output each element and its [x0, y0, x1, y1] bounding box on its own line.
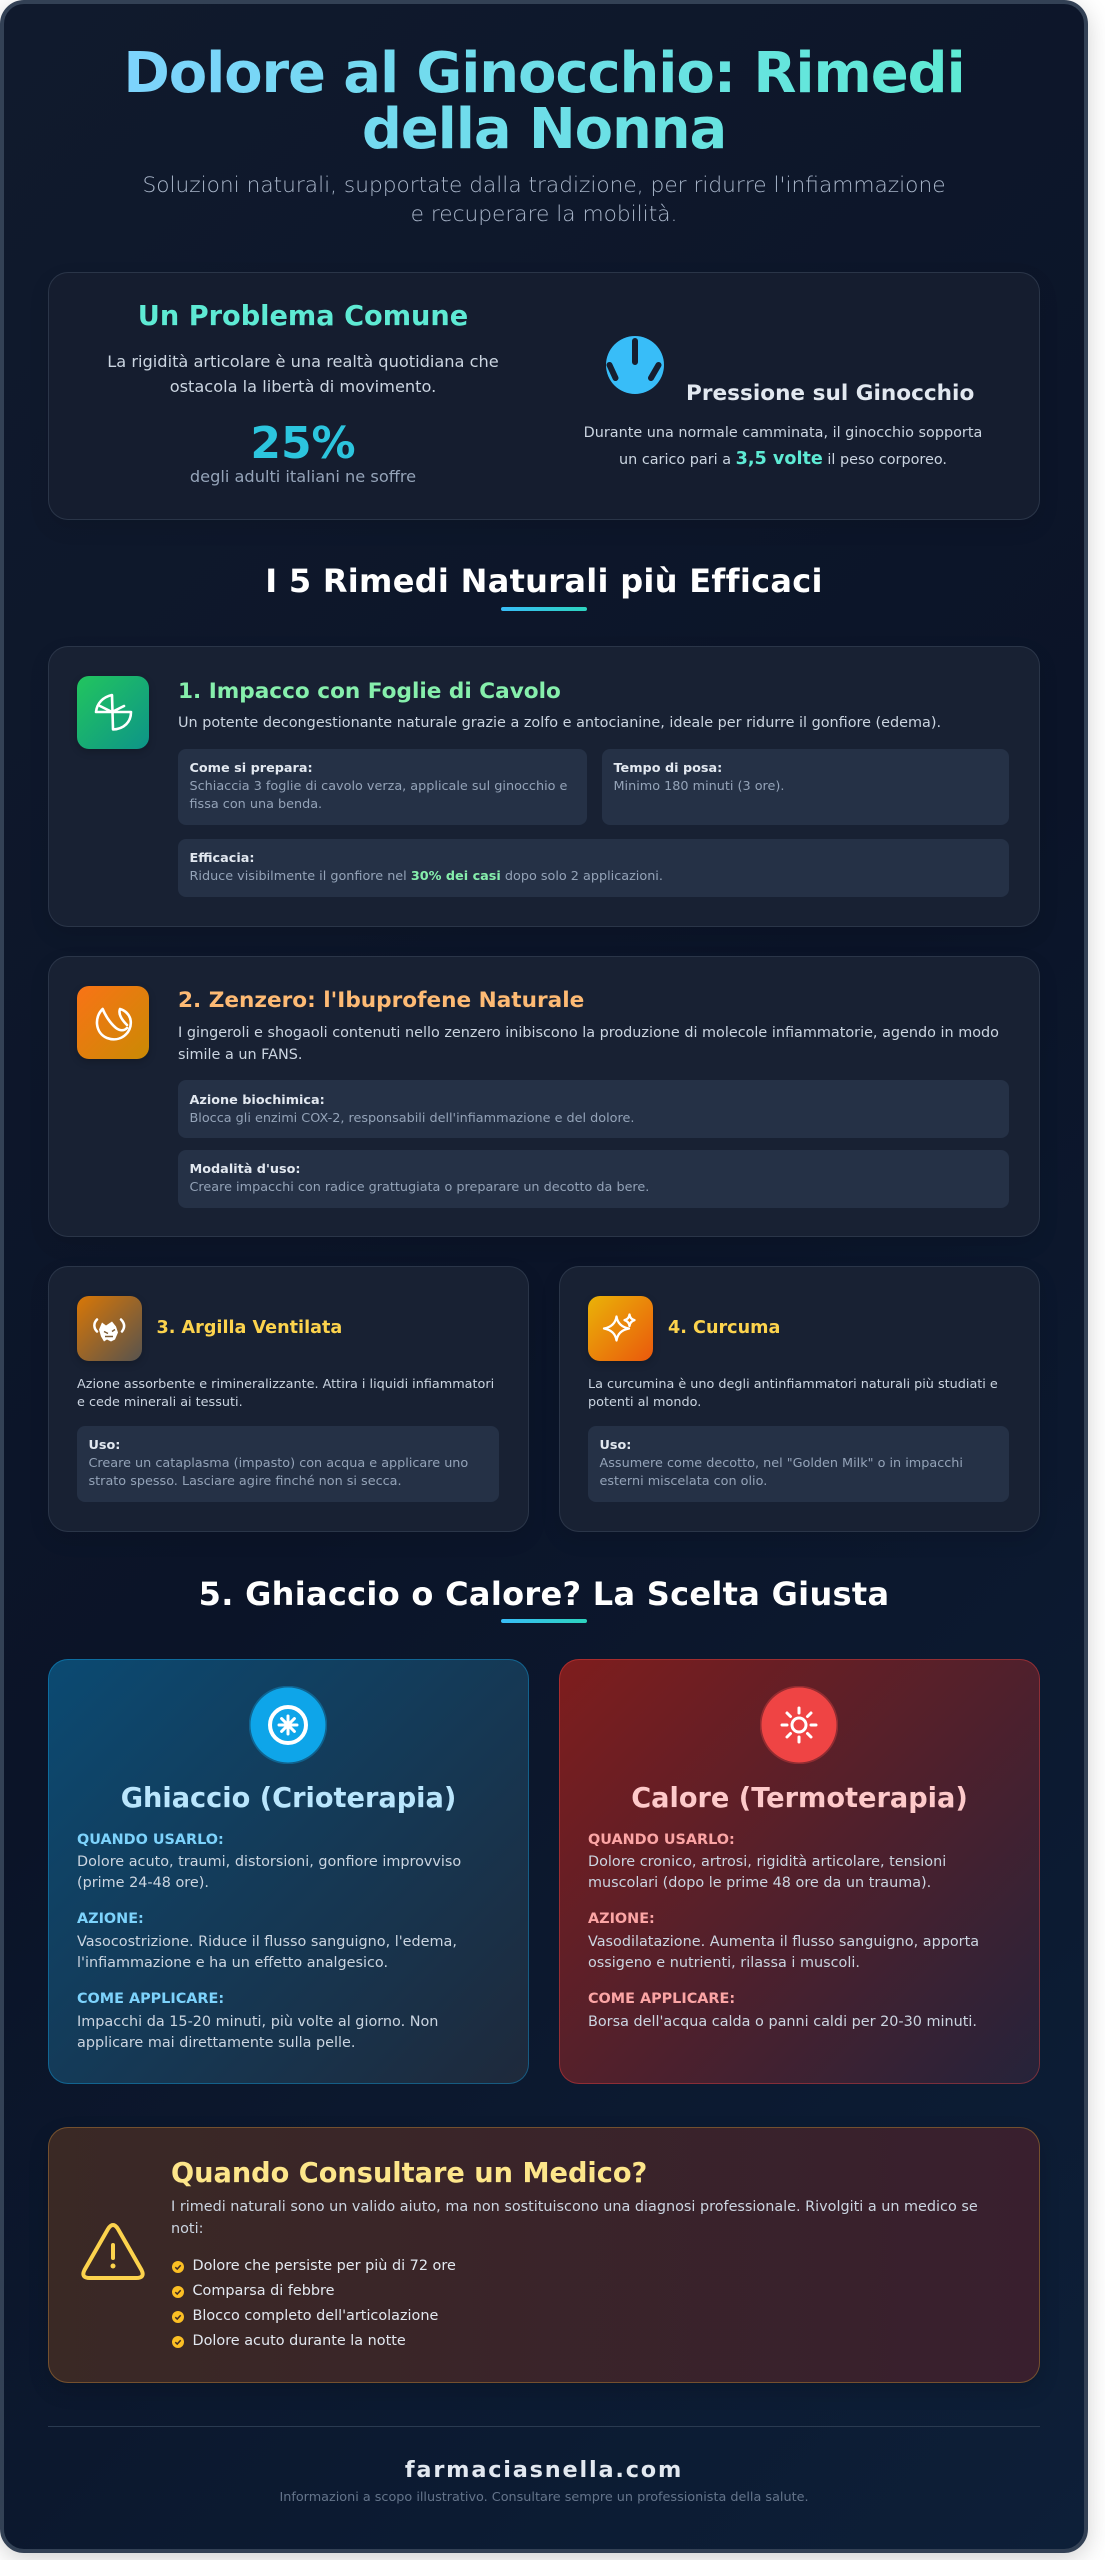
- icon: snowflake: [249, 1686, 327, 1764]
- list item 1: Dolore che persiste per più di 72 ore: [192, 2258, 456, 2274]
- box: use: Uso:: [88, 1438, 120, 1453]
- box: use: Uso:: [600, 1438, 631, 1453]
- text: pressure: Durante una normale camminata, il ginocchio sopporta: [584, 425, 982, 441]
- heading: 4. Curcuma: [668, 1318, 780, 1338]
- panel: ice therapy: [48, 1659, 529, 2084]
- box: how to use: Creare impacchi con radice grattugiata o preparare un decotto da bere.: [190, 1180, 649, 1195]
- list item 4: Dolore acuto durante la notte: [192, 2333, 406, 2349]
- heading: pressione: Pressione sul Ginocchio: [686, 380, 974, 406]
- description: simile a un FANS.: [178, 1047, 302, 1063]
- description: potenti al mondo.: [588, 1395, 701, 1410]
- panel: remedy 3 clay: [48, 1266, 529, 1532]
- title: della Nonna: [362, 97, 726, 162]
- box: biochemical action: Blocca gli enzimi COX-2, responsabili dell'infiammazione e del dolore.: [190, 1111, 634, 1126]
- description: Un potente decongestionante naturale grazie a zolfo e antocianine, ideale per ridurre il gonfiore (edema).: [178, 715, 941, 731]
- heading: Quando Consultare un Medico?: [171, 2158, 647, 2188]
- box: use: [77, 1426, 499, 1502]
- subtitle: e recuperare la mobilità.: [411, 202, 677, 227]
- box: how to use: [178, 1150, 1009, 1208]
- heading: 3. Argilla Ventilata: [156, 1318, 342, 1338]
- subtitle: Soluzioni naturali, supportate dalla tradizione, per ridurre l'infiammazione: [142, 173, 946, 198]
- description: noti:: [171, 2221, 203, 2237]
- panel: when to see a doctor: [48, 2127, 1040, 2383]
- box: preparation: fissa con una benda.: [190, 797, 322, 812]
- box: use: esterni miscelata con olio.: [600, 1474, 767, 1489]
- text: Dolore cronico, artrosi, rigidità articolare, tensioni: [588, 1854, 946, 1870]
- icon: sparkles: [588, 1296, 653, 1360]
- section: action: AZIONE:: [77, 1911, 144, 1927]
- text: [77, 1854, 461, 1891]
- box: preparation: Schiaccia 3 foglie di cavolo verza, applicale sul ginocchio e: [190, 779, 567, 794]
- text: Vasocostrizione. Riduce il flusso sanguigno, l'edema,: [77, 1934, 457, 1950]
- text: [588, 1854, 946, 1891]
- text: [588, 1934, 979, 1971]
- panel: heat therapy: [559, 1659, 1040, 2084]
- heading: i 5 rimedi: I 5 Rimedi Naturali più Efficaci: [265, 562, 823, 600]
- box: preparation: [178, 749, 587, 825]
- section: when to use: QUANDO USARLO:: [77, 1832, 224, 1848]
- description: [588, 1377, 998, 1410]
- subtitle: [142, 173, 946, 227]
- text: ossigeno e nutrienti, rilassa i muscoli.: [588, 1955, 860, 1971]
- text: Dolore acuto, traumi, distorsioni, gonfiore improvviso: [77, 1854, 461, 1870]
- text: rigidity: [107, 352, 499, 396]
- description: I rimedi naturali sono un valido aiuto, ma non sostituiscono una diagnosi professionale. Rivolgiti a un medico se: [171, 2199, 978, 2215]
- section: action: AZIONE:: [588, 1911, 655, 1927]
- section: how to apply: COME APPLICARE:: [77, 1991, 224, 2007]
- heading: 2. Zenzero: l'Ibuprofene Naturale: [178, 988, 584, 1012]
- box: preparation: Come si prepara:: [190, 761, 313, 776]
- heading underline: [501, 607, 587, 611]
- text: [77, 1934, 457, 1971]
- panel: intro problem and pressure: [48, 272, 1040, 520]
- icon: leaf: [77, 676, 149, 749]
- box: time: Minimo 180 minuti (3 ore).: [614, 779, 784, 794]
- text: pressure: un carico pari a 3,5 volte il peso corporeo.: [619, 449, 947, 469]
- panel: remedy 2 ginger: [48, 956, 1040, 1237]
- description: I gingeroli e shogaoli contenuti nello zenzero inibiscono la produzione di molecole infiammatorie, agendo in modo: [178, 1025, 999, 1041]
- stat: 25%: 25%: [250, 418, 356, 469]
- text: Vasodilatazione. Aumenta il flusso sanguigno, apporta: [588, 1934, 979, 1950]
- section: how to apply: COME APPLICARE:: [588, 1991, 735, 2007]
- box: use: strato spesso. Lasciare agire finché non si secca.: [88, 1474, 402, 1489]
- heading: Calore (Termoterapia): [631, 1783, 968, 1814]
- footer: disclaimer: Informazioni a scopo illustrativo. Consultare sempre un professionista della salute.: [279, 2490, 809, 2505]
- section: when to use: QUANDO USARLO:: [588, 1832, 735, 1848]
- heading: 1. Impacco con Foglie di Cavolo: [178, 678, 561, 704]
- icon: clay: [77, 1296, 142, 1360]
- text: muscolari (dopo le prime 48 ore da un trauma).: [588, 1875, 931, 1891]
- text: Impacchi da 15-20 minuti, più volte al giorno. Non: [77, 2014, 438, 2030]
- text: applicare mai direttamente sulla pelle.: [77, 2035, 355, 2051]
- box: use: Creare un cataplasma (impasto) con acqua e applicare uno: [88, 1456, 468, 1471]
- icon: sun: [760, 1686, 838, 1764]
- text: (prime 24-48 ore).: [77, 1875, 209, 1891]
- description: La curcumina è uno degli antinfiammatori naturali più studiati e: [588, 1377, 998, 1392]
- text: [77, 2014, 438, 2051]
- text: Borsa dell'acqua calda o panni caldi per 20-30 minuti.: [588, 2014, 977, 2030]
- text: pressure: [584, 425, 982, 469]
- box: time: Tempo di posa:: [614, 761, 722, 776]
- panel: remedy 4 turmeric: [559, 1266, 1040, 1532]
- list item 3: Blocco completo dell'articolazione: [192, 2308, 438, 2324]
- description: [171, 2199, 978, 2237]
- text: rigidity: La rigidità articolare è una realtà quotidiana che: [107, 352, 499, 370]
- icon: warning triangle: [81, 2223, 145, 2280]
- title: Dolore al Ginocchio: Rimedi: [123, 41, 965, 106]
- box: biochemical action: [178, 1080, 1009, 1138]
- box: time: [602, 749, 1009, 825]
- text: l'infiammazione e ha un effetto analgesico.: [77, 1955, 388, 1971]
- footer: site name: farmaciasnella.com: [405, 2457, 683, 2483]
- box: how to use: Modalità d'uso:: [190, 1162, 301, 1177]
- box: biochemical action: Azione biochimica:: [190, 1093, 325, 1108]
- heading: un problema comune: Un Problema Comune: [138, 301, 468, 332]
- list item 2: Comparsa di febbre: [192, 2282, 334, 2298]
- icon: ginger: [77, 986, 149, 1059]
- panel: remedy 1 cabbage: [48, 646, 1040, 927]
- heading: ghiaccio o calore: 5. Ghiaccio o Calore? La Scelta Giusta: [199, 1575, 889, 1613]
- box: efficacy: Riduce visibilmente il gonfiore nel 30% dei casi dopo solo 2 applicazioni.: [190, 869, 663, 884]
- title: [123, 46, 965, 158]
- description: e cede minerali ai tessuti.: [77, 1395, 243, 1410]
- icon: gauge: [606, 336, 664, 394]
- heading underline: [501, 1619, 587, 1623]
- box: use: [588, 1426, 1009, 1502]
- box: use: Assumere come decotto, nel "Golden Milk" o in impacchi: [600, 1456, 963, 1471]
- description: [77, 1377, 494, 1410]
- text: rigidity: ostacola la libertà di movimento.: [170, 377, 436, 396]
- heading: Ghiaccio (Crioterapia): [121, 1783, 456, 1814]
- description: [178, 1025, 999, 1063]
- description: Azione assorbente e rimineralizzante. Attira i liquidi infiammatori: [77, 1377, 494, 1392]
- box: efficacy: Efficacia:: [190, 851, 254, 866]
- stat caption: degli adulti italiani ne soffre: [190, 466, 416, 486]
- box: efficacy: [178, 839, 1009, 897]
